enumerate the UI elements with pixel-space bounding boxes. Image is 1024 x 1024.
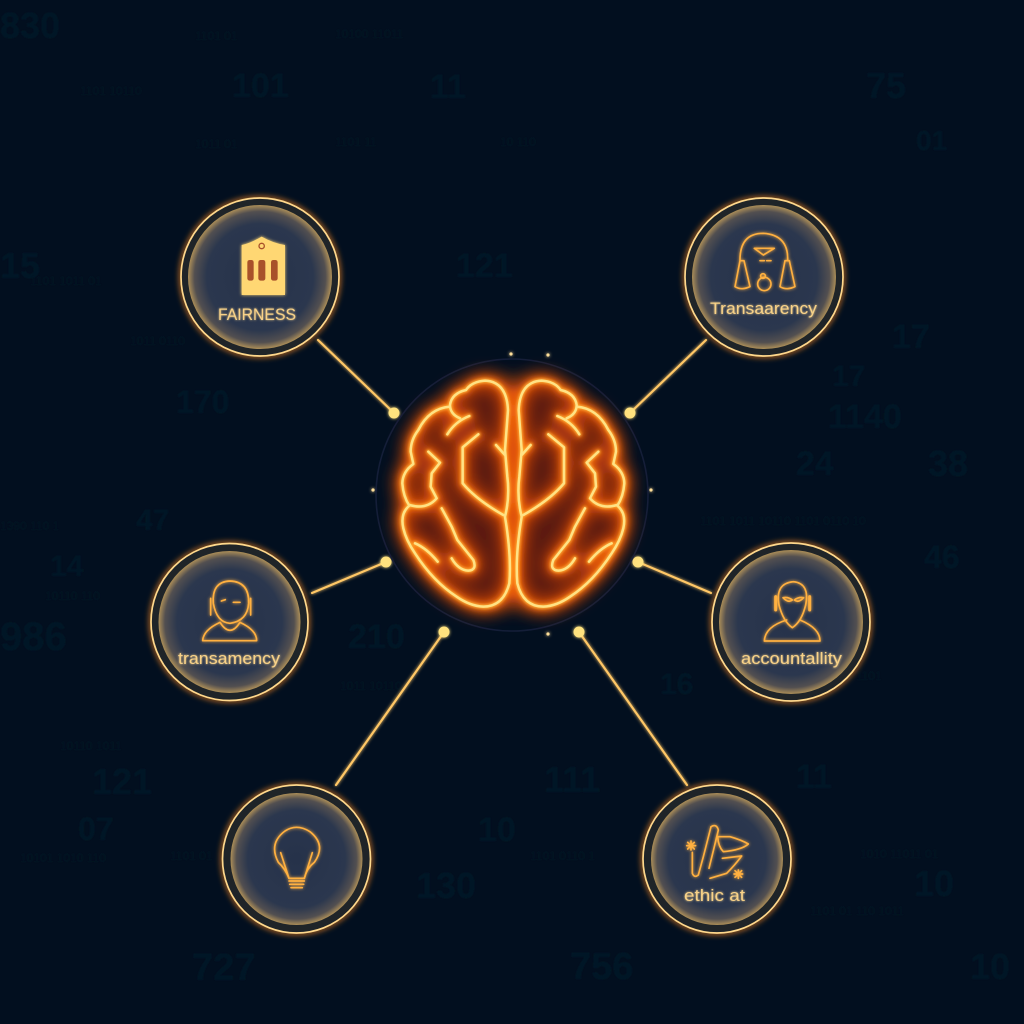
faint background numbers: 756 (570, 946, 633, 988)
brain outline and folds (402, 381, 624, 607)
brain halo (402, 378, 625, 608)
faint background numbers: 75 (866, 65, 906, 106)
transparency ring (685, 198, 843, 356)
ethic ring (643, 785, 791, 933)
faint background data rows: 1101 10110 (80, 84, 142, 98)
accountability ring (712, 543, 870, 701)
wide orange brain glow (402, 381, 624, 607)
faint background data rows: 1011 01 (195, 137, 238, 151)
faint background numbers: 121 (456, 247, 513, 285)
faint background numbers: 111 (544, 759, 600, 800)
fairness ring (181, 198, 339, 356)
connector lines (312, 340, 711, 785)
faint background numbers: 10 (970, 946, 1010, 987)
tight brain glow (402, 381, 624, 607)
faint background numbers: 170 (176, 384, 229, 420)
faint background data rows: 1101 01 110 1011 (810, 904, 904, 918)
fairness label: FAIRNESS (218, 305, 296, 324)
faint background data rows (0, 27, 939, 918)
transamency label: transamency (178, 649, 281, 668)
faint background numbers: 121 (92, 761, 152, 802)
faint background numbers: 986 (0, 615, 67, 659)
faint background data rows: 1101 1011 01 (30, 274, 102, 288)
faint background numbers: 38 (928, 443, 968, 484)
icon: bald person with headset (764, 582, 820, 641)
faint background data rows: 1390 110 1 (0, 519, 59, 533)
faint background numbers: 14 (50, 550, 84, 583)
icon: light bulb (275, 827, 320, 888)
central fissure glow (508, 390, 519, 597)
faint background numbers: 11 (430, 68, 466, 106)
transamency ring (151, 544, 308, 700)
node: transparency (685, 198, 843, 356)
faint background numbers: 210 (348, 618, 405, 656)
faint background data rows: 10 110 (500, 135, 536, 149)
icon: person with headphones (203, 581, 257, 641)
faint background data rows: 1011 0110 (130, 334, 185, 348)
central brain (402, 378, 625, 608)
faint background data rows: 10110 110 (45, 589, 100, 603)
faint background data rows: 1101 11 (335, 135, 377, 149)
narrow brain glow (402, 381, 624, 607)
idea ring (222, 785, 370, 933)
node: transamency (151, 544, 308, 700)
faint background numbers: 01 (916, 125, 947, 156)
faint background data rows: 1101 0110 1 (530, 849, 595, 863)
faint background numbers: 830 (0, 5, 60, 46)
faint background data rows: 1010 11011 01 (860, 847, 939, 861)
faint background data rows: 10101 1010 110 (20, 851, 106, 865)
connector end dots (380, 408, 644, 638)
small sparkle dots (371, 352, 653, 636)
faint background numbers: 47 (136, 504, 169, 537)
faint ring around brain (376, 359, 648, 631)
faint background data rows: 11010 1101 (820, 669, 882, 683)
node: fairness (181, 198, 339, 356)
icon: price tag (242, 237, 285, 295)
node: ethic ai (643, 785, 791, 933)
faint background data rows: 10100 11011 (335, 27, 404, 41)
faint background numbers: 130 (416, 865, 476, 906)
faint background data rows: 1101 1011 10110 1101 0110 10 (700, 514, 866, 528)
faint background numbers: 15 (0, 245, 40, 286)
faint background numbers: 46 (924, 539, 960, 575)
node: accountability (712, 543, 870, 701)
faint background numbers: 24 (796, 445, 834, 483)
faint background numbers: 10 (914, 863, 954, 904)
faint background numbers: 11 (796, 758, 832, 796)
transparency label: Transaarency (710, 299, 818, 318)
icon: hand with sparkles (687, 826, 748, 878)
icon: headset and bottles (735, 233, 795, 291)
brain hemisphere fills (402, 381, 624, 607)
faint background numbers: 07 (78, 811, 114, 847)
faint background numbers: 1140 (828, 398, 902, 436)
faint background numbers: 727 (192, 947, 255, 989)
faint background numbers: 16 (660, 668, 693, 701)
faint background data rows: 1101 01 (170, 849, 213, 863)
faint background numbers: 10 (478, 811, 516, 849)
faint background data rows: 1011 10110 (340, 679, 402, 693)
faint background data rows: 10110 1011 (60, 739, 122, 753)
accountability label: accountallity (741, 649, 843, 668)
faint background numbers: 17 (892, 318, 930, 356)
ethic label: ethic at (684, 886, 745, 905)
node: idea (222, 785, 370, 933)
faint background data rows: 1101 01 (195, 29, 238, 43)
faint background numbers: 17 (832, 360, 865, 393)
faint background numbers: 101 (232, 67, 289, 105)
